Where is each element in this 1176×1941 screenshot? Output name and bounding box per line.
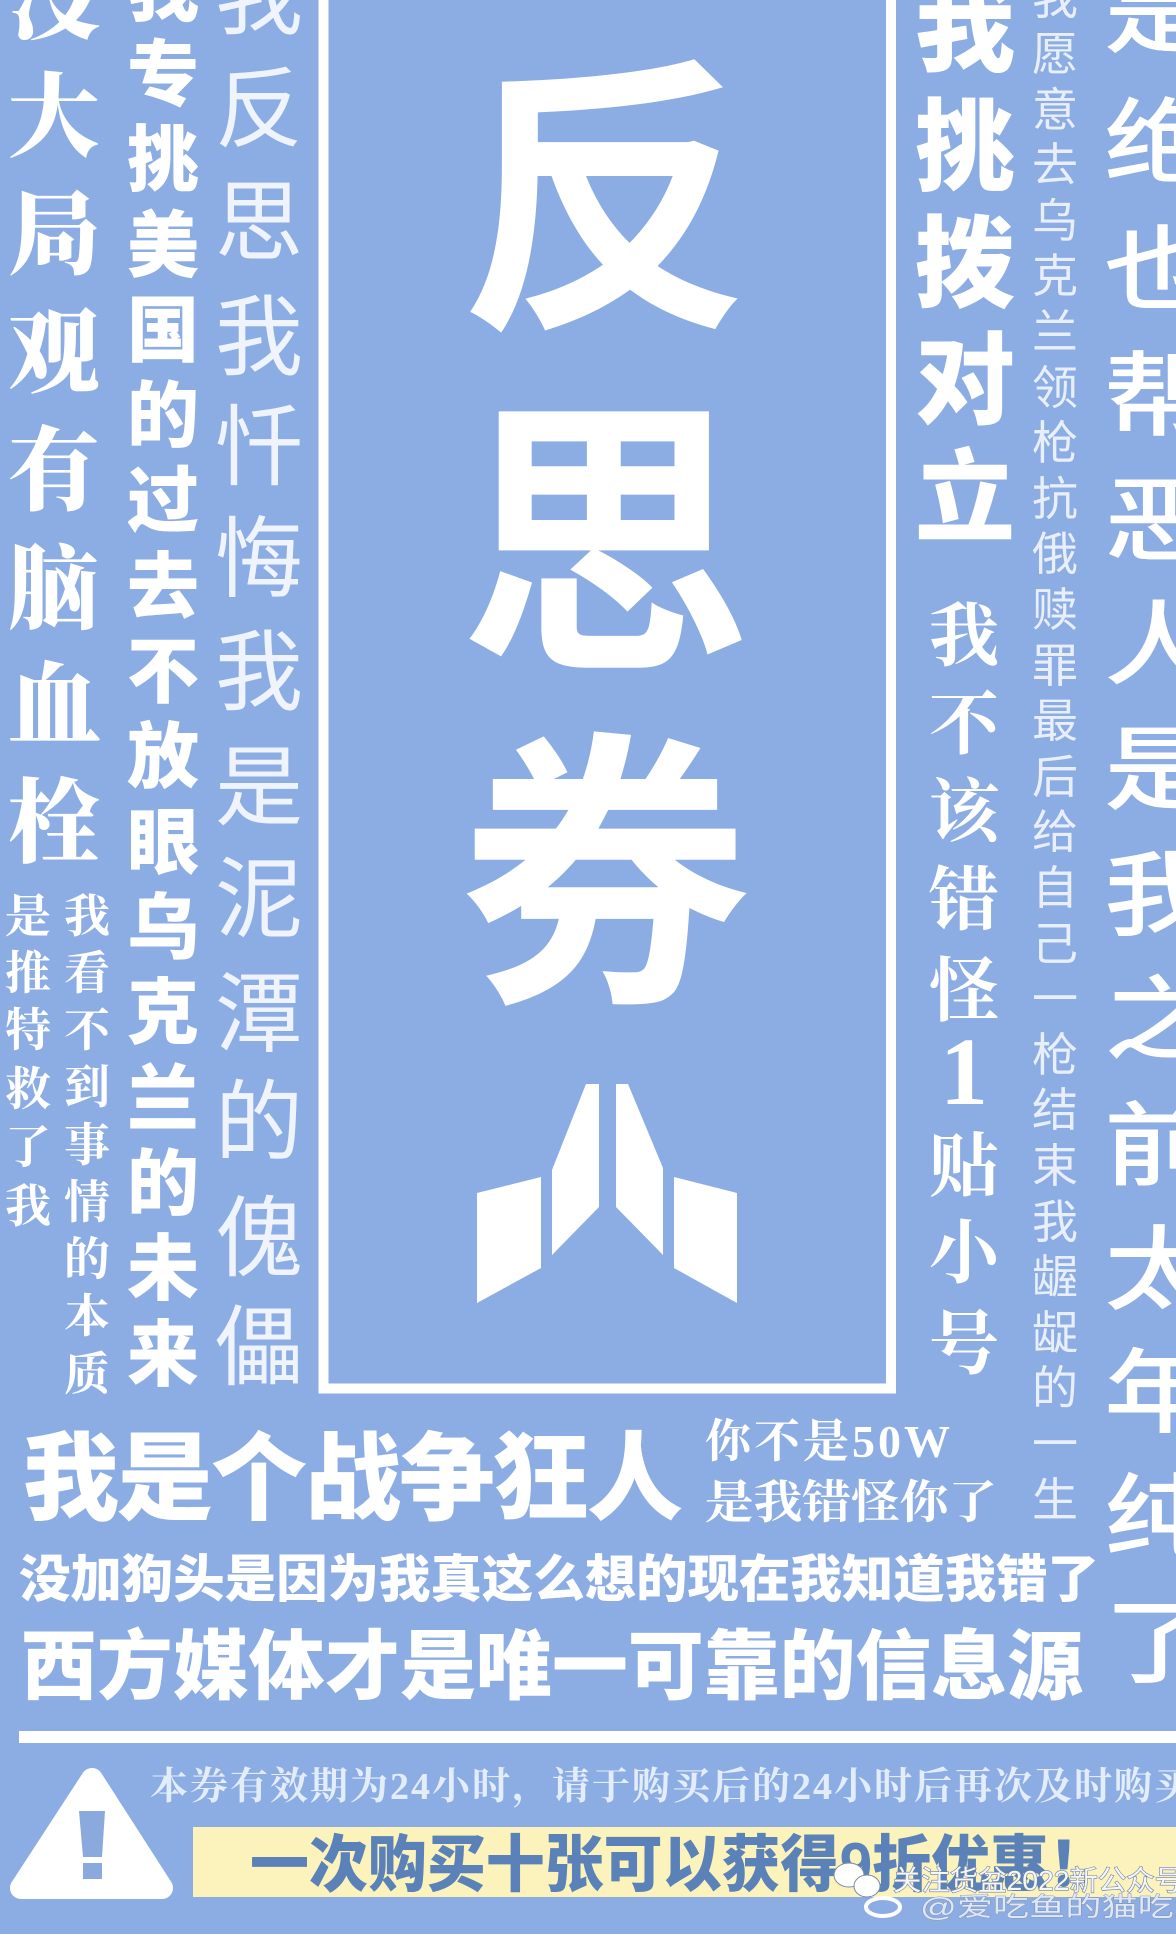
right column: 我不该错怪1贴小号: 我不该错怪1 贴小号 <box>929 599 1005 1384</box>
icon: praying hands <box>477 1084 737 1303</box>
icon: wechat <box>834 1863 880 1897</box>
promo text: 一次购买十张可以获得9折优惠！ <box>250 1831 1108 1900</box>
icon: weibo <box>866 1898 900 1916</box>
right small column: long confession: 我愿意去乌克兰领枪抗俄赎罪最后给自己一枪结束我龌龊的一生 <box>1032 0 1078 1526</box>
watermark <box>834 1863 1176 1922</box>
validity notice: 本券有效期为24小时，请于购买后的24小时后再次及时购买 <box>150 1766 1176 1809</box>
icon: warning triangle <box>21 1779 162 1888</box>
line one: 你不是50W <box>705 1416 953 1467</box>
left small column: 是推特救了我: 是推特救了我 <box>5 891 51 1232</box>
watermark line two: @爱吃鱼的猫吃鱼 <box>920 1892 1176 1922</box>
line two: 是我错怪你了 <box>705 1477 997 1528</box>
headline: 我是个战争狂人: 我是个战争狂人 <box>23 1426 683 1533</box>
watermark line one: 关注货盆2022新公众号 <box>893 1865 1176 1896</box>
central frame <box>324 0 891 1388</box>
line: 没加狗头: 没加狗头是因为我真这么想的现在我知道我错了 <box>19 1551 1099 1608</box>
bottom white strip <box>0 1934 1176 1941</box>
divider bar <box>19 1731 1176 1743</box>
title: 反思券: 反思券 <box>459 42 751 1043</box>
left small column: 我看不到事情的本质: 我看不到事情的本质 <box>64 891 112 1400</box>
promo banner <box>193 1827 1176 1900</box>
line: 西方媒体: 西方媒体才是唯一可靠的信息源 <box>21 1625 1083 1710</box>
side note: 你不是50W 是我错怪你了 <box>705 1416 997 1528</box>
